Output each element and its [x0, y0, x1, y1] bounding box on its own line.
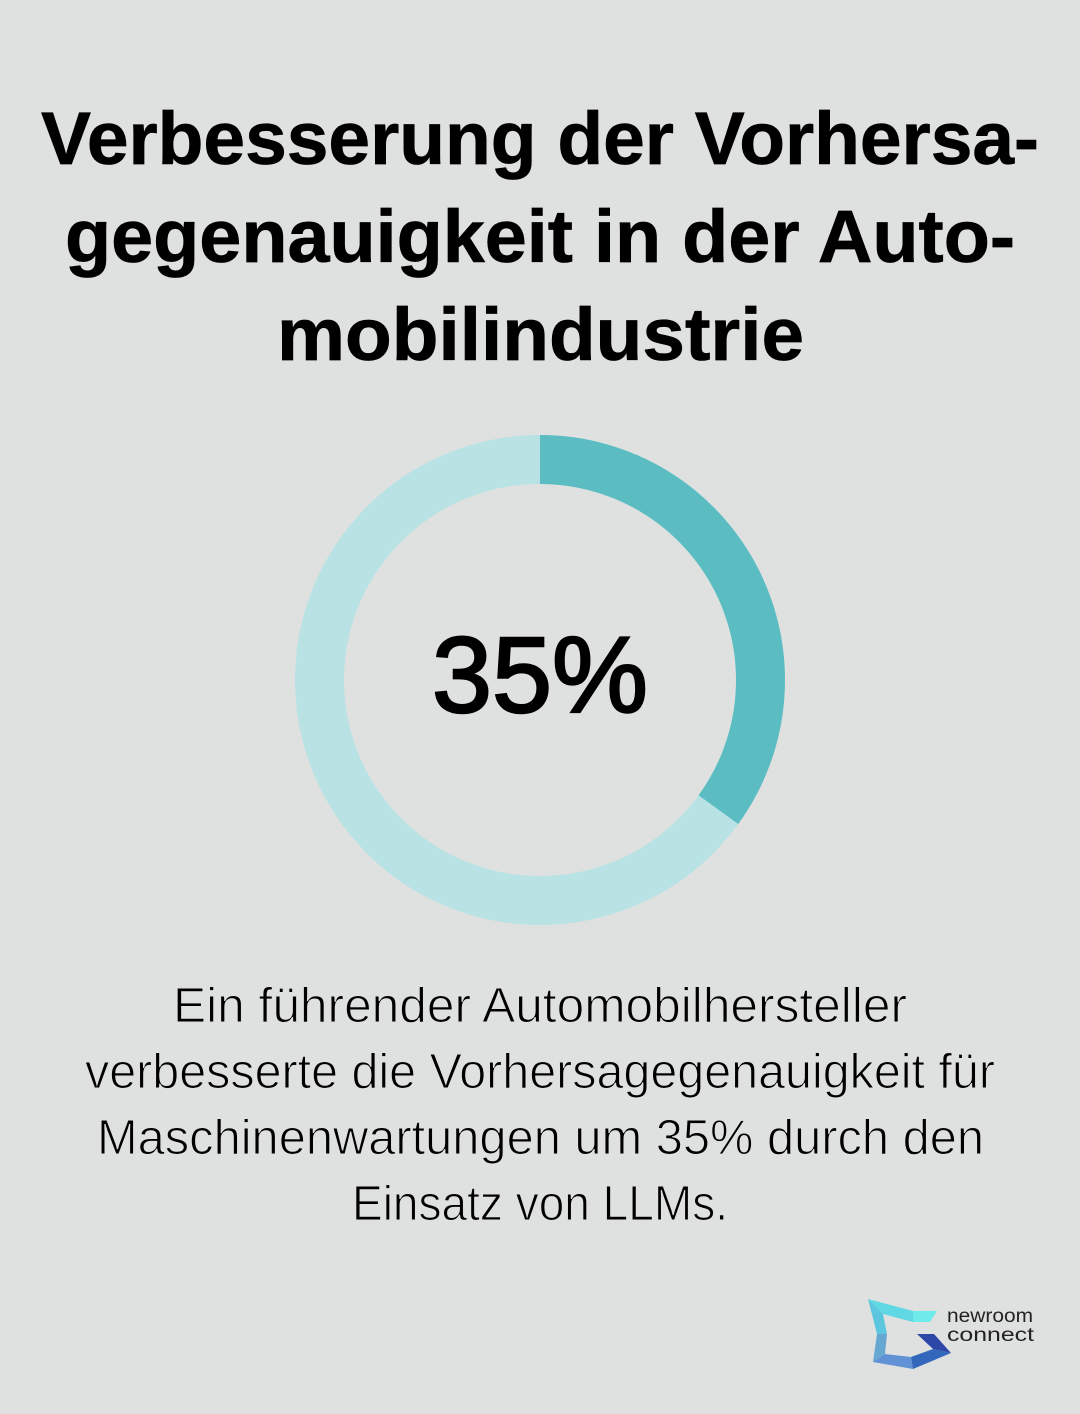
logo: newroom connect — [868, 1299, 1035, 1369]
logo icon — [868, 1299, 951, 1369]
description text: Maschinenwartungen um 35% durch den — [97, 1111, 984, 1165]
description text — [85, 979, 995, 1231]
donut track — [320, 460, 760, 900]
logo wordmark: connect — [947, 1325, 1035, 1346]
logo wordmark: newroom — [947, 1306, 1033, 1327]
description text: Einsatz von LLMs. — [352, 1177, 728, 1231]
title: Verbesserung der Vorhersa- — [41, 97, 1039, 180]
donut value segment — [540, 435, 785, 824]
donut chart: 35% — [320, 435, 785, 900]
title — [41, 97, 1039, 376]
description text: verbesserte die Vorhersagegenauigkeit für — [85, 1045, 995, 1099]
title: gegenauigkeit in der Auto- — [65, 195, 1015, 278]
donut value label: 35% — [432, 614, 648, 735]
title: mobilindustrie — [277, 293, 804, 376]
description text: Ein führender Automobilhersteller — [173, 979, 907, 1033]
logo wordmark — [947, 1306, 1035, 1346]
